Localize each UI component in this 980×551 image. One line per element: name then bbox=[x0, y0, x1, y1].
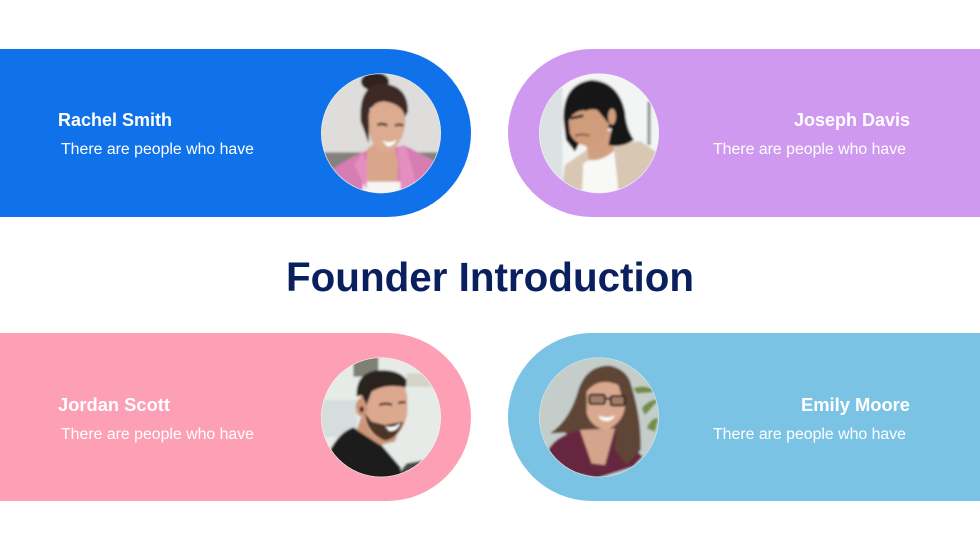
portrait: Rachel Smith bbox=[321, 73, 441, 194]
panel: Joseph Davis bbox=[508, 49, 980, 217]
portrait: Emily Moore bbox=[539, 357, 659, 478]
title: Founder Introduction bbox=[286, 254, 694, 300]
panel: Rachel Smith bbox=[0, 49, 471, 217]
card shape: purple bbox=[508, 49, 980, 217]
name: Jordan Scott: Jordan Scott bbox=[58, 395, 170, 415]
description: Rachel Smith: There are people who have bbox=[61, 141, 254, 158]
card shape: sky blue bbox=[508, 333, 980, 501]
panel: Emily Moore bbox=[508, 333, 980, 501]
card shape: pink bbox=[0, 333, 471, 501]
panel: Jordan Scott bbox=[0, 333, 471, 501]
card shape: blue bbox=[0, 49, 471, 217]
name: Rachel Smith: Rachel Smith bbox=[58, 110, 172, 130]
portrait: Jordan Scott bbox=[321, 357, 441, 478]
name: Emily Moore: Emily Moore bbox=[801, 395, 910, 415]
description: Jordan Scott: There are people who have bbox=[61, 426, 254, 443]
description: Joseph Davis: There are people who have bbox=[713, 141, 906, 158]
portrait: Joseph Davis bbox=[539, 73, 659, 194]
name: Joseph Davis: Joseph Davis bbox=[794, 110, 910, 130]
description: Emily Moore: There are people who have bbox=[713, 426, 906, 443]
